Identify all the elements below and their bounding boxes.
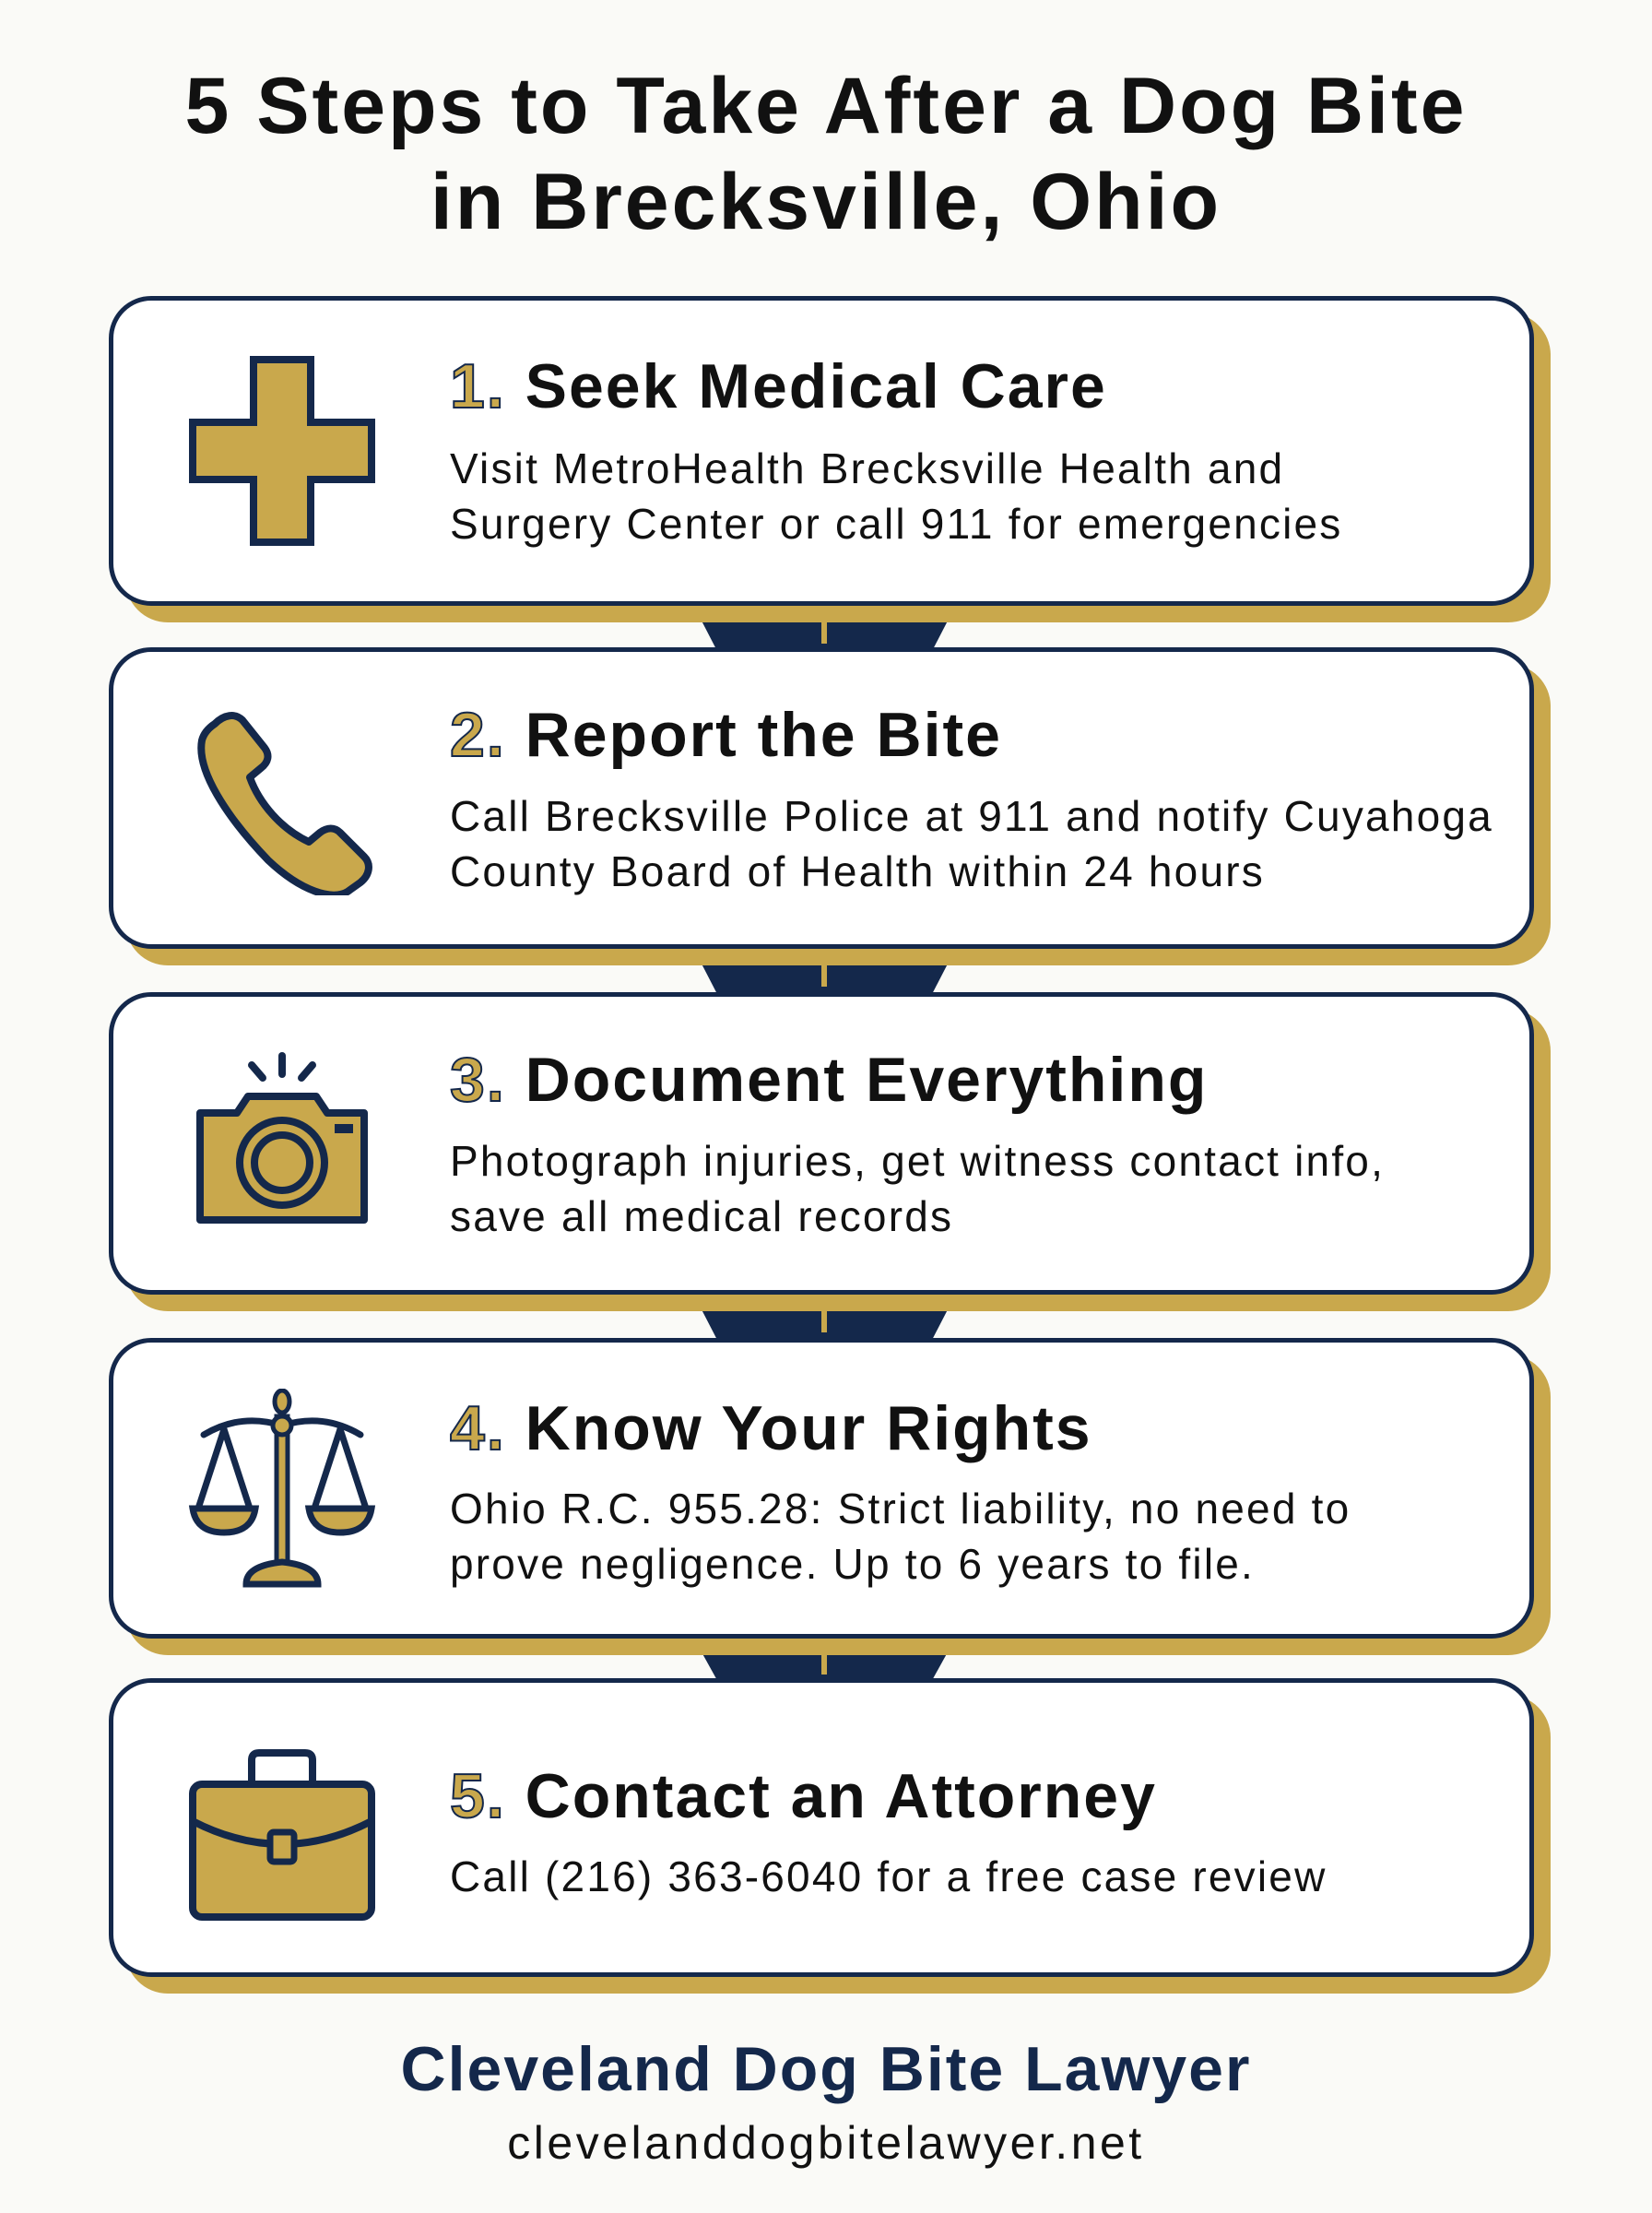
footer: website: clevelanddogbitelawyer.net xyxy=(507,2117,1145,2169)
connector 4-5 xyxy=(702,1655,946,1678)
panel: step 1 xyxy=(109,296,1534,606)
icon: camera xyxy=(196,1052,368,1224)
text: step 3: Photograph injuries, get witness contact info, xyxy=(450,1137,1385,1185)
text: step 1: Visit MetroHealth Brecksville Health and xyxy=(450,444,1284,492)
text: step 5: Call (216) 363-6040 for a free case review xyxy=(450,1852,1328,1900)
connector 3-4 xyxy=(702,1311,947,1338)
heading: step 5: 5. Contact an Attorney xyxy=(450,1761,1157,1831)
text: step 1 xyxy=(450,444,1343,548)
connector 2-3 xyxy=(702,965,947,992)
text: step 3 xyxy=(450,1137,1385,1240)
panel: step 2 xyxy=(109,647,1534,949)
text: step 3: save all medical records xyxy=(450,1192,953,1240)
text: step 2: Call Brecksville Police at 911 and notify Cuyahoga xyxy=(450,792,1493,840)
title: 5 Steps to Take After a Dog Bite xyxy=(184,62,1468,150)
text: step 4: prove negligence. Up to 6 years to file. xyxy=(450,1540,1255,1588)
heading: step 4: 4. Know Your Rights xyxy=(450,1393,1092,1463)
text: step 4 xyxy=(450,1485,1351,1588)
icon: briefcase xyxy=(189,1749,375,1921)
panel: step 4 xyxy=(109,1338,1534,1639)
connector 1-2 xyxy=(702,622,947,647)
heading: step 3: 3. Document Everything xyxy=(450,1045,1208,1115)
panel: step 5 xyxy=(109,1678,1534,1977)
icon: scales of justice xyxy=(188,1389,376,1588)
heading: step 2: 2. Report the Bite xyxy=(450,700,1002,770)
title: in Brecksville, Ohio xyxy=(431,158,1221,246)
icon: phone xyxy=(197,712,372,895)
text: step 2: County Board of Health within 24 hours xyxy=(450,847,1265,895)
panel: step 3 xyxy=(109,992,1534,1295)
title xyxy=(184,62,1468,246)
text: step 1: Surgery Center or call 911 for emergencies xyxy=(450,500,1343,548)
text: step 4: Ohio R.C. 955.28: Strict liability, no need to xyxy=(450,1485,1351,1533)
heading: step 1: 1. Seek Medical Care xyxy=(450,351,1107,421)
text: step 2 xyxy=(450,792,1493,895)
icon: medical cross xyxy=(189,356,375,546)
footer: brand name: Cleveland Dog Bite Lawyer xyxy=(401,2034,1251,2104)
